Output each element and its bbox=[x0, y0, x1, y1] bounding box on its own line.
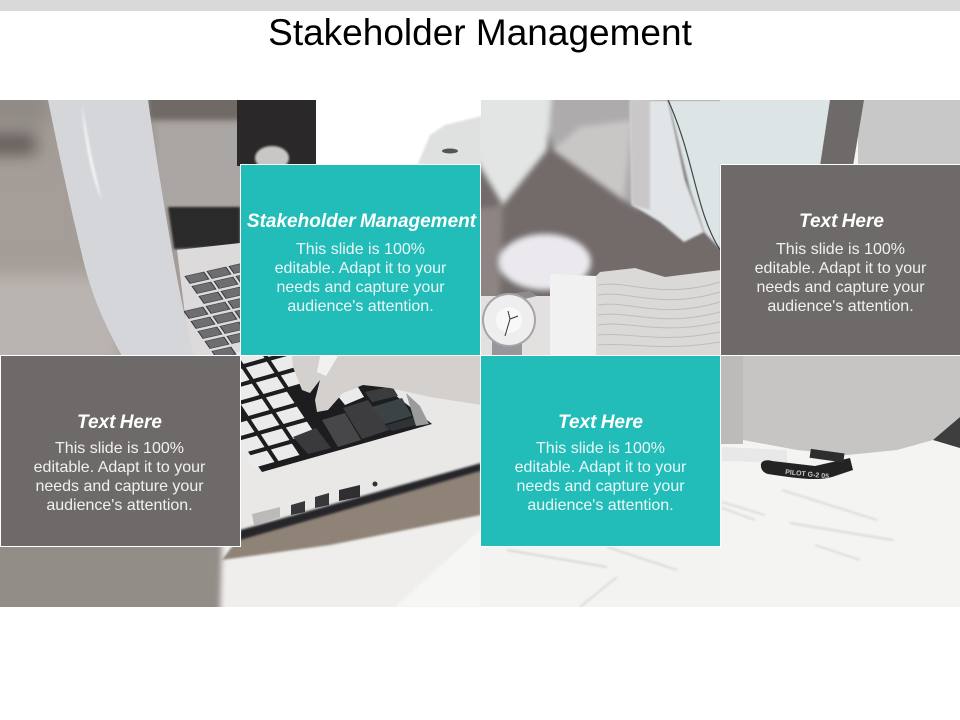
heading: Text Here bbox=[77, 412, 162, 433]
shirt cuff bbox=[550, 274, 600, 356]
laptop underside and wooden table edge bbox=[222, 463, 481, 560]
pen: PILOT G-2 05 bbox=[785, 469, 829, 481]
body text: This slide is 100% editable. Adapt it to your needs and capture your audience's attention. bbox=[34, 440, 205, 514]
laptop ports bbox=[252, 482, 378, 525]
sheets of paper, lower centre bbox=[395, 530, 490, 607]
body text: This slide is 100% editable. Adapt it to your needs and capture your audience's attention. bbox=[755, 241, 926, 315]
dark monitor and white wall bbox=[237, 100, 482, 170]
title: Stakeholder Management bbox=[268, 12, 692, 53]
lower keyboard bbox=[186, 333, 481, 530]
wooden desk, blurred backdrop bbox=[0, 90, 960, 620]
sleeve and desk bbox=[481, 100, 720, 296]
panel: text here (upper right, grey) bbox=[721, 165, 960, 355]
body text: This slide is 100% editable. Adapt it to your needs and capture your audience's attention. bbox=[515, 440, 686, 514]
upper right sweater bbox=[720, 100, 960, 166]
heading: Text Here bbox=[558, 412, 643, 433]
pen bbox=[761, 449, 853, 481]
knit sleeve bbox=[596, 268, 721, 356]
panel: text here (lower left, grey) bbox=[1, 356, 240, 546]
heading: Stakeholder Management bbox=[247, 211, 476, 232]
top bar bbox=[0, 0, 960, 11]
typing hand bbox=[292, 356, 481, 412]
panel: text here (lower middle, teal) bbox=[481, 356, 720, 546]
panel: stakeholder management (teal) bbox=[241, 165, 480, 355]
laptop lid bbox=[48, 100, 194, 356]
laptop base and keyboard, upper part bbox=[163, 207, 302, 358]
papers and sweater, lower right bbox=[480, 356, 960, 607]
watch bbox=[481, 291, 550, 356]
body text: This slide is 100% editable. Adapt it to your needs and capture your audience's attention. bbox=[275, 241, 446, 315]
lid highlight bbox=[82, 105, 102, 200]
background photo: laptop, watch, sweater, notes bbox=[0, 100, 960, 607]
heading: Text Here bbox=[799, 211, 884, 232]
